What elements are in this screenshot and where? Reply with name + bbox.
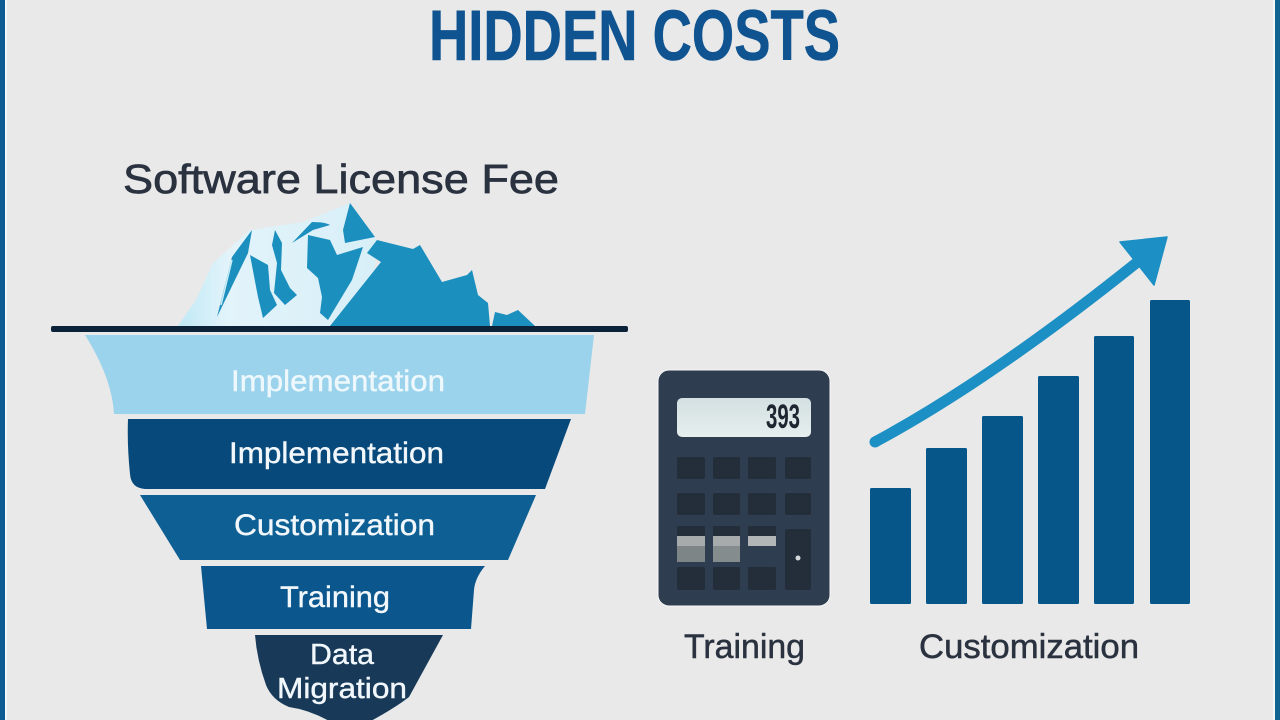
iceberg upper sliver [292, 222, 330, 243]
layer 4: training [201, 566, 485, 629]
label: training: Training [684, 628, 805, 666]
iceberg main facet [330, 240, 490, 326]
calculator display number: 393 [766, 398, 800, 436]
calculator key dot [796, 556, 800, 560]
iceberg light body [178, 203, 377, 326]
layer 1: implementation: Implementation [231, 365, 445, 398]
layer 3: customization: Customization [234, 509, 435, 542]
layer 5: data migration: Migration [277, 673, 407, 705]
waterline [51, 326, 628, 332]
layer 3: customization [140, 495, 536, 560]
funnel: hidden cost layers [85, 335, 594, 720]
calculator body [658, 370, 830, 606]
arrow: rising trend [875, 237, 1167, 442]
layer 5: data migration [255, 635, 443, 720]
left border [0, 0, 7, 720]
iceberg sliver highlight [221, 260, 232, 305]
right border [1273, 0, 1280, 720]
calculator keys [677, 457, 811, 590]
layer 4: training: Training [280, 581, 390, 614]
icon: calculator [658, 370, 830, 606]
layer 2: implementation: Implementation [229, 437, 444, 470]
iceberg small facet [492, 310, 535, 326]
iceberg centre facet [307, 235, 363, 320]
iceberg peak facet [343, 203, 375, 243]
iceberg inner facet [272, 230, 297, 305]
layer 5: data migration: Data [310, 639, 375, 671]
heading: software license fee: Software License Fee [123, 156, 559, 202]
iceberg left sliver [217, 230, 252, 317]
bar chart [870, 300, 1190, 604]
label: customization: Customization [919, 628, 1139, 666]
iceberg left facet [250, 255, 277, 318]
iceberg [178, 203, 535, 326]
calculator highlighted keys [677, 536, 776, 562]
layer 2: implementation [128, 419, 571, 489]
layer 1: implementation [85, 335, 594, 414]
calculator screen [677, 398, 811, 437]
